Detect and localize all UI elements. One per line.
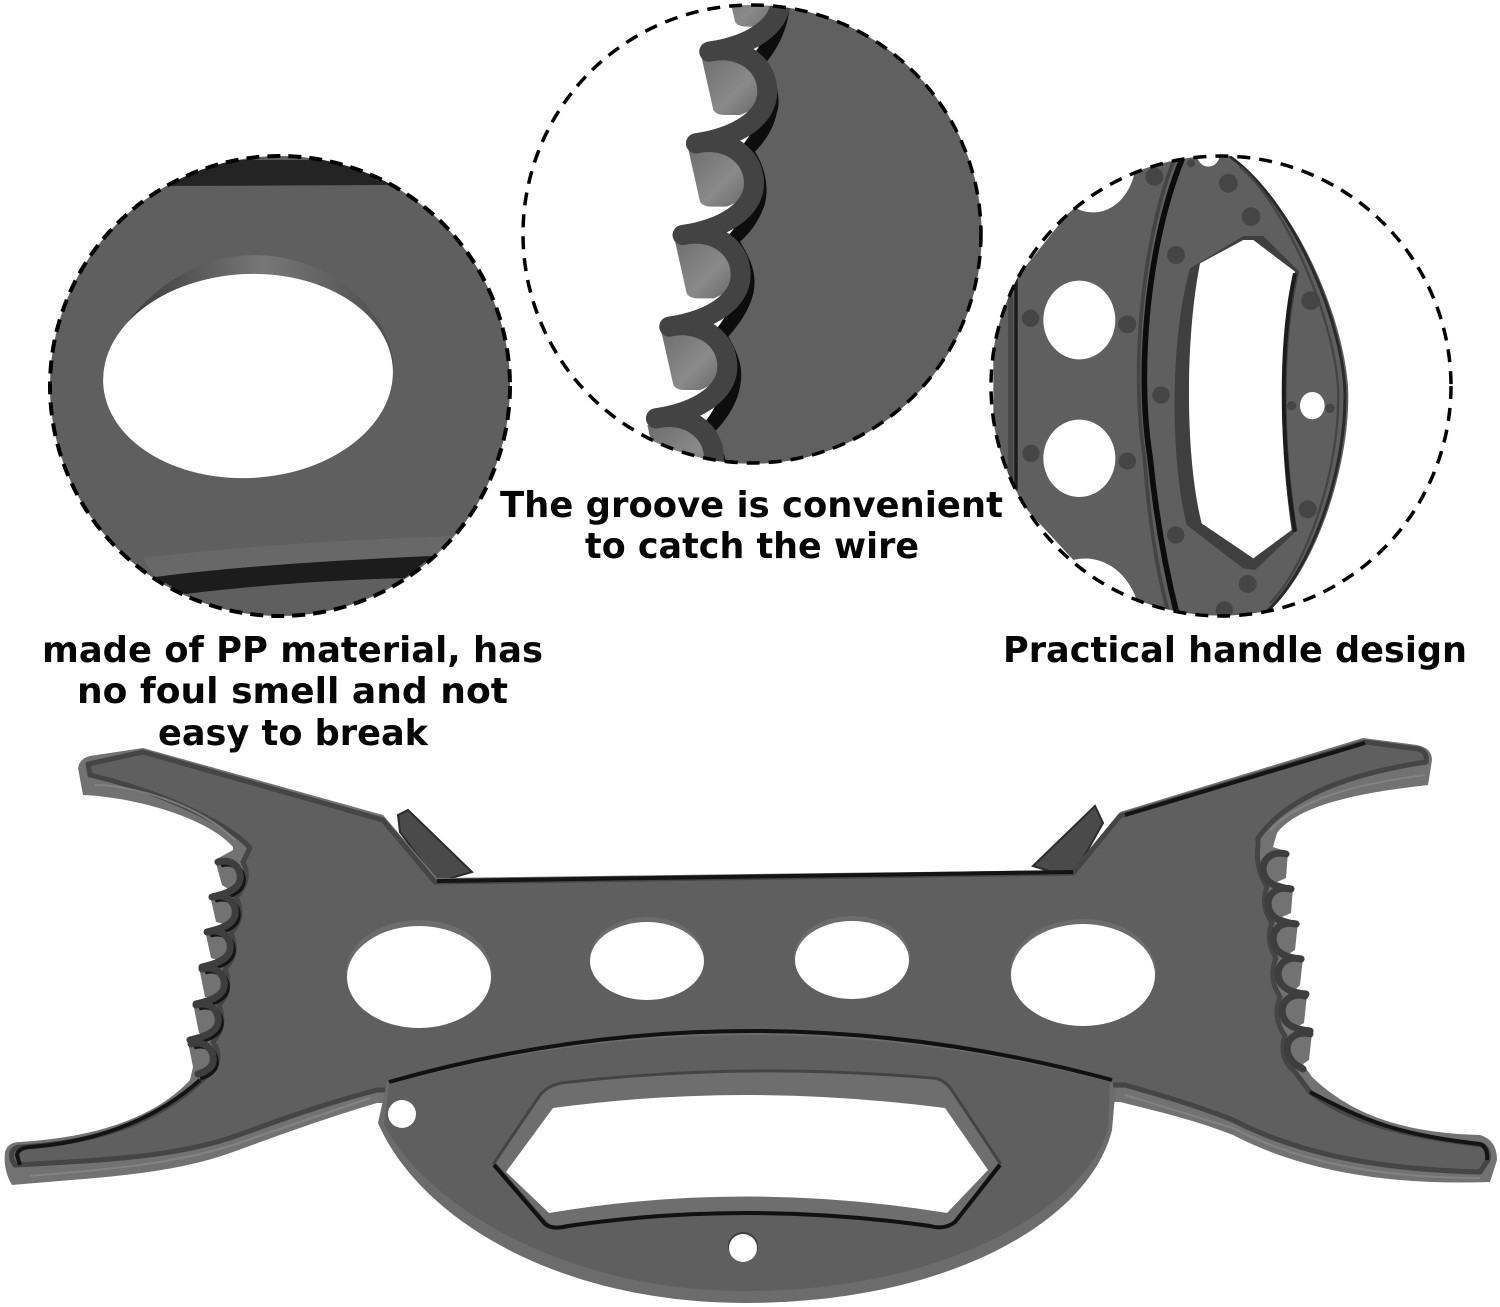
tool side wall	[5, 738, 1497, 1185]
bottom dark band	[155, 556, 432, 594]
left edge line	[1014, 277, 1018, 490]
round holes	[1043, 281, 1115, 359]
panel: groove detail circle	[521, 3, 983, 465]
heading: groove caption: to catch the wire	[585, 526, 919, 567]
product: wire winder tool	[5, 738, 1497, 1303]
small holes	[388, 1100, 416, 1128]
dashed ring: material circle	[50, 156, 510, 616]
black rim lines	[17, 743, 1487, 1165]
wall highlights	[30, 775, 1480, 1178]
hole inner wall	[103, 255, 394, 378]
heading: groove caption	[500, 485, 1003, 567]
four round holes	[346, 920, 492, 1026]
handle opening rim	[494, 1071, 1000, 1227]
left teeth rim	[190, 861, 240, 1074]
handle seam arc	[389, 1031, 1112, 1082]
heading: material caption: easy to break	[158, 713, 429, 754]
heading: groove caption: The groove is convenient	[500, 485, 1003, 526]
groove tooth faces	[647, 0, 785, 487]
heading: material caption	[42, 630, 543, 754]
back tabs	[398, 810, 472, 882]
rivet dots	[1022, 159, 1335, 619]
groove black shadow	[706, 6, 810, 464]
handle body	[993, 153, 1348, 620]
handle side wall	[378, 1033, 1115, 1303]
right teeth rim	[1263, 853, 1310, 1069]
handle opening	[506, 1095, 988, 1213]
top dark band	[163, 160, 395, 186]
panel: material detail circle	[40, 145, 520, 625]
handle face	[384, 1035, 1110, 1291]
oval hole	[98, 267, 398, 485]
left teeth shadow	[193, 864, 243, 1078]
small hole	[1300, 392, 1325, 419]
heading: material caption: made of PP material, has	[42, 630, 543, 671]
handle opening	[1175, 236, 1299, 570]
tool face	[11, 742, 1488, 1172]
flat gray face	[713, 0, 993, 467]
groove rim	[643, 0, 781, 510]
panel: handle detail circle	[991, 153, 1451, 620]
heading: handle caption: Practical handle design	[1003, 630, 1467, 671]
heading: material caption: no foul smell and not	[77, 671, 508, 712]
curved seam	[1144, 160, 1182, 613]
